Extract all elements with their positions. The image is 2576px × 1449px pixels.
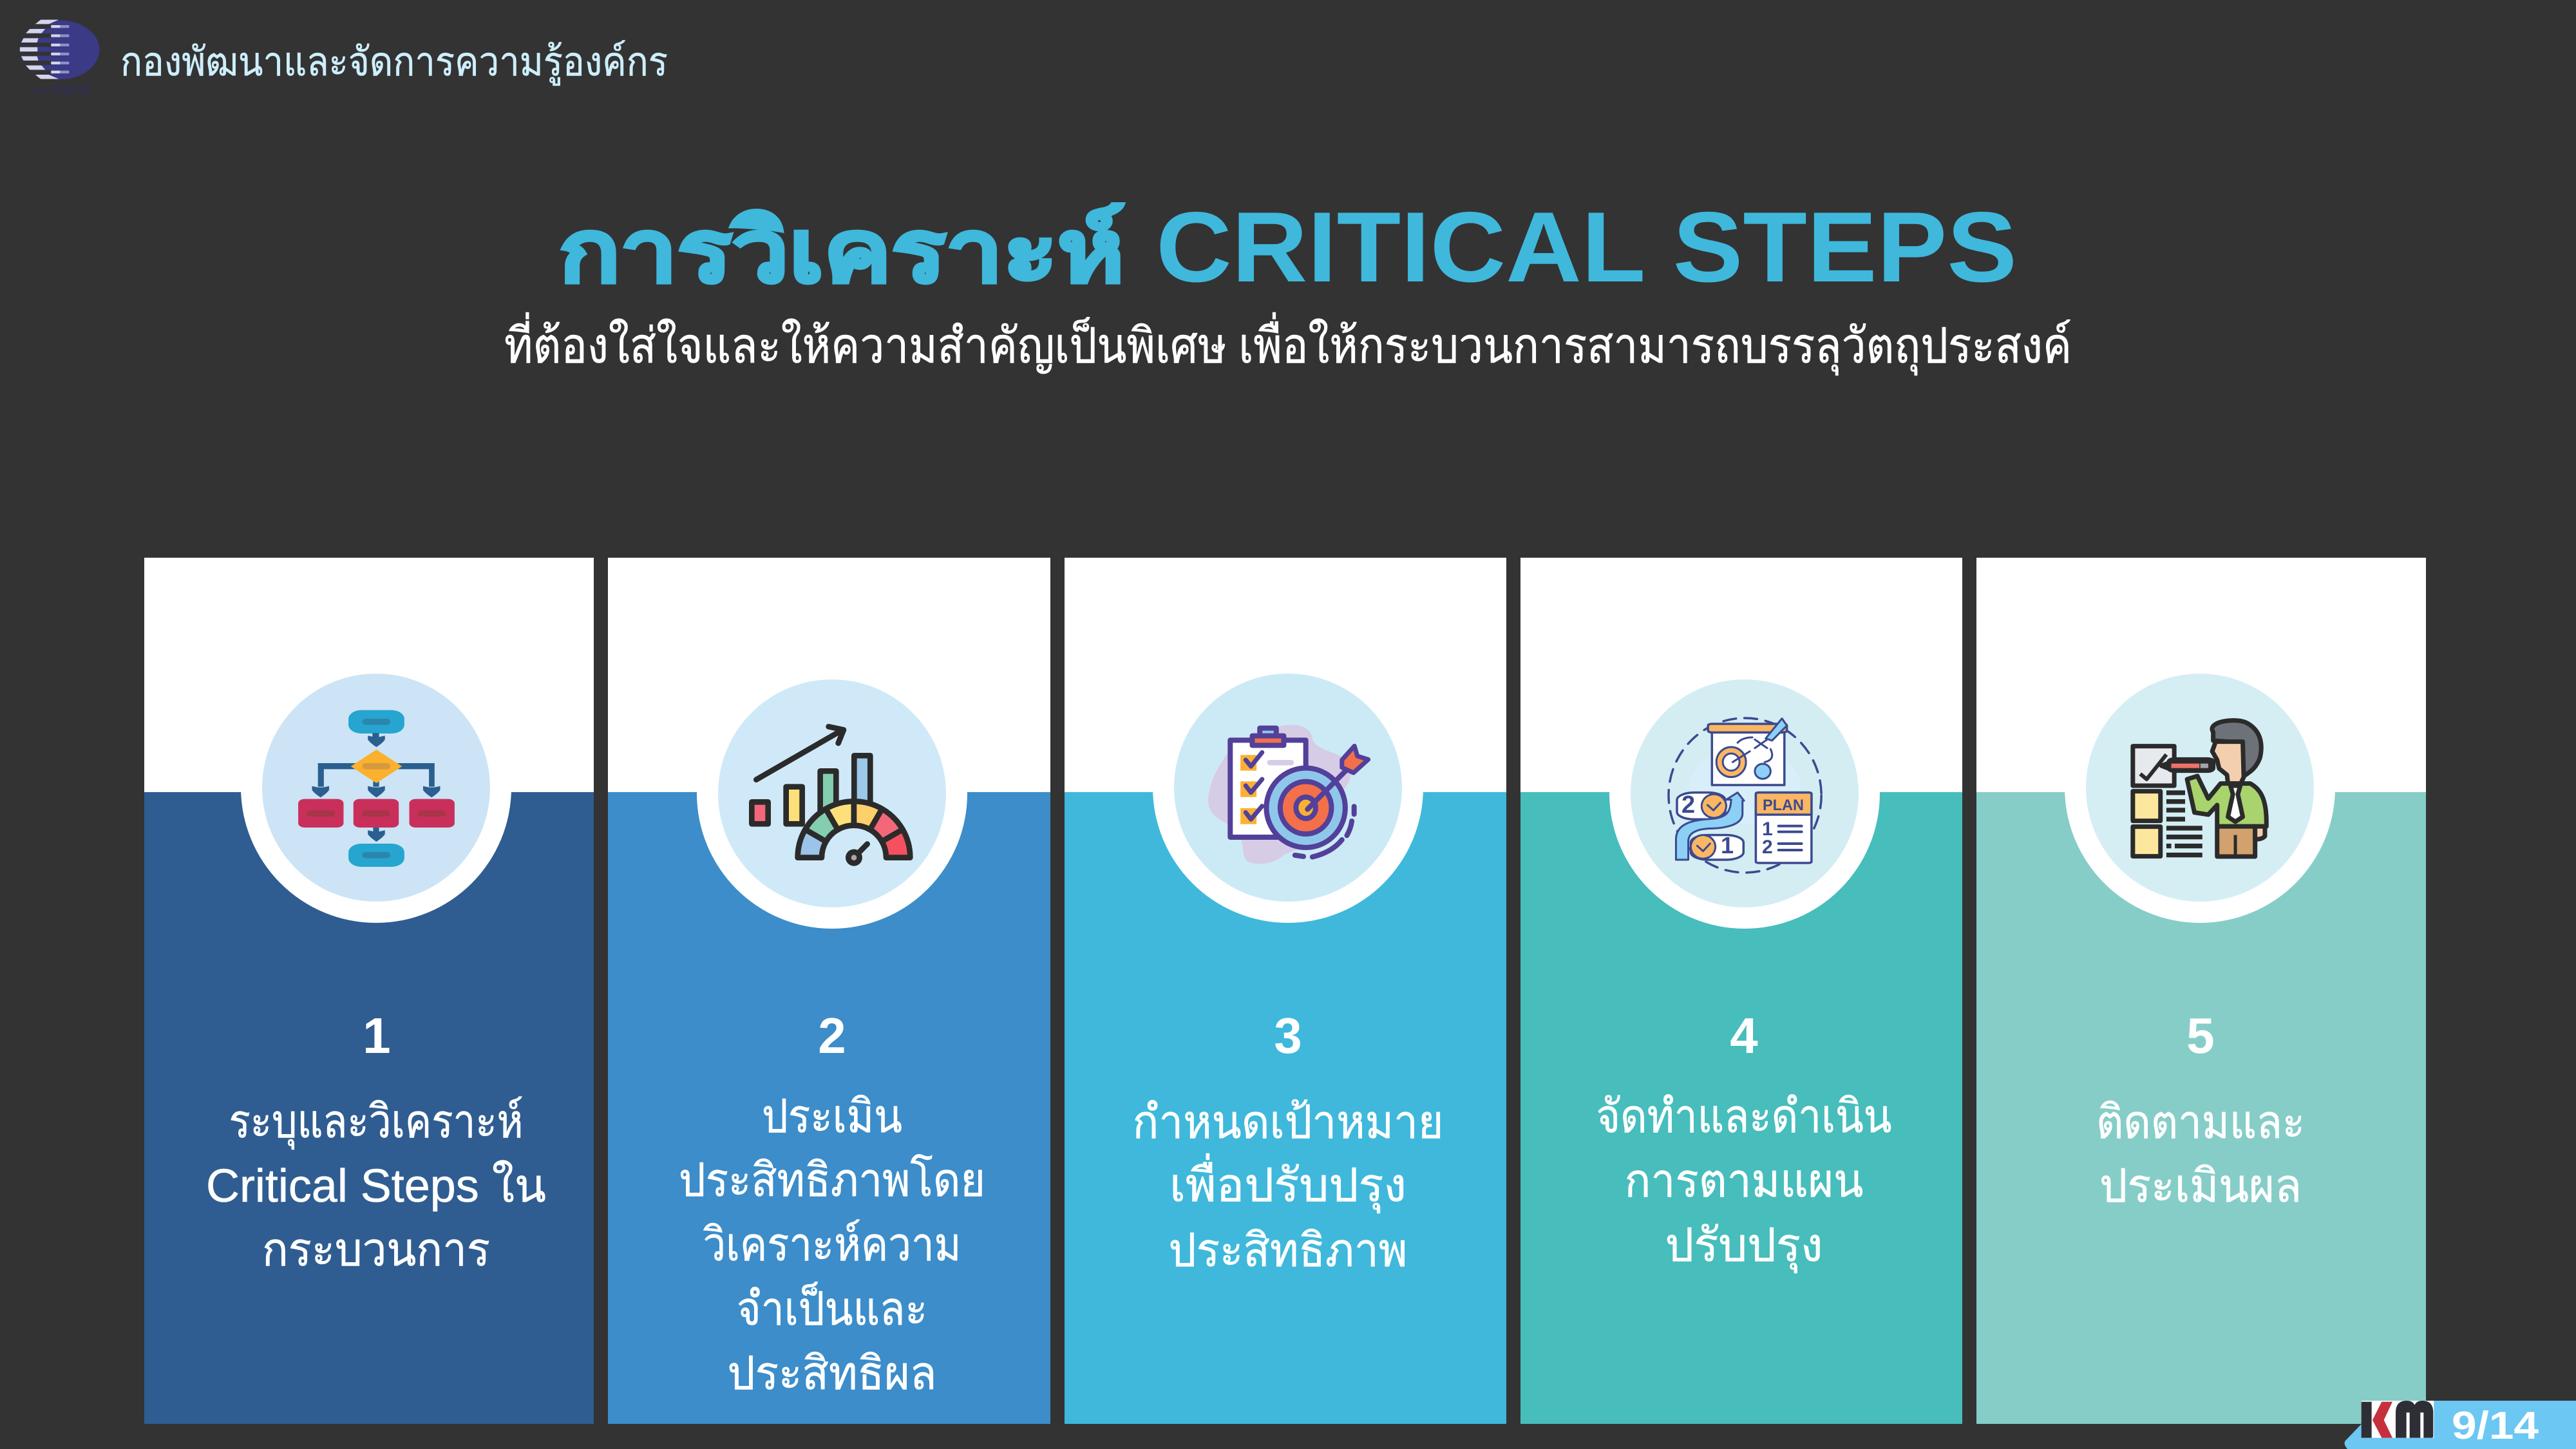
step 3 description: เพื่อปรับปรุง [1170,1153,1406,1213]
step 2 description [679,1091,985,1399]
icon: flowchart [298,710,455,867]
step number 1: 1 [363,1007,391,1064]
KM logo [2362,1401,2434,1438]
step number 5: 5 [2186,1007,2215,1064]
step 3 description: ประสิทธิภาพ [1168,1225,1408,1276]
step 3 description [1132,1097,1444,1276]
step 5 description: ติดตามและ [2096,1097,2305,1148]
step 2 description: ประสิทธิภาพโดย [679,1153,985,1206]
step 1 description: Critical Steps ใน [206,1160,546,1212]
page badge [2345,1401,2576,1449]
icon: plan board: 1 [1762,819,1773,840]
icon: plan board: 2 [1762,837,1773,858]
step 1 description: ระบุและวิเคราะห์ [229,1096,523,1150]
icon: performance gauge and bars [752,726,910,863]
step 2 description: ประสิทธิผล [728,1348,936,1399]
step 2 description: จำเป็นและ [737,1282,927,1335]
icon: plan board: 2 [1681,791,1695,819]
subtitle: ที่ต้องใส่ใจและให้ความสำคัญเป็นพิเศษ เพื่อให้กระบวนการสามารถบรรลุวัตถุประสงค์ [504,312,2072,375]
step number 2: 2 [818,1007,846,1064]
step 1 description [206,1096,546,1276]
step 5 description [2096,1097,2305,1212]
step 2 description: ประเมิน [762,1091,902,1142]
title: การวิเคราะห์ [559,203,1124,300]
step number 3: 3 [1274,1007,1302,1064]
step 4 description [1596,1091,1892,1273]
step 4 description: จัดทำและดำเนิน [1596,1091,1892,1142]
panel: step 4 [1520,558,1962,1424]
title: CRITICAL STEPS [1156,191,2017,303]
icon: plan board [1669,718,1821,873]
step 5 description: ประเมินผล [2099,1160,2302,1212]
panel: step 1 [144,558,594,1424]
icon: plan board: 1 [1721,832,1734,858]
title [559,191,2017,303]
panel: step 2 [608,558,1050,1424]
logo: TISTR globe [18,20,99,97]
panel: step 3 [1065,558,1506,1424]
icon: checklist and target [1208,725,1368,864]
icon: man reviewing checklist [2133,721,2266,857]
header: department name: กองพัฒนาและจัดการความรู้องค์กร [120,40,668,86]
panel: step 5 [1976,558,2426,1424]
step 2 description: วิเคราะห์ความ [703,1219,961,1271]
icon: plan board: PLAN [1763,797,1804,814]
step 4 description: ปรับปรุง [1665,1220,1823,1273]
step 4 description: การตามแผน [1624,1155,1864,1207]
logo: TISTR globe: วว-TISTR [32,84,90,97]
step 3 description: กำหนดเป้าหมาย [1132,1097,1444,1148]
step number 4: 4 [1730,1007,1758,1064]
page number: 9/14 [2452,1404,2539,1447]
step 1 description: กระบวนการ [262,1224,490,1276]
